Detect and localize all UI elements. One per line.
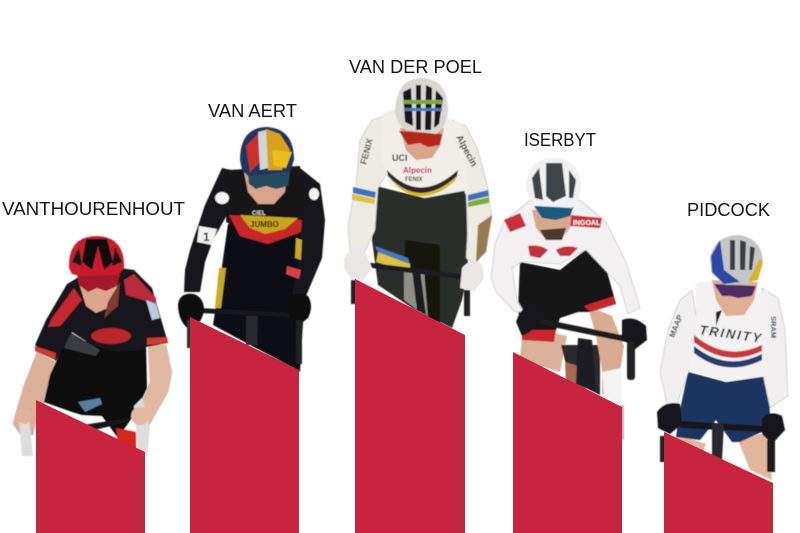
label: Van der Poel: VAN DER POEL — [349, 57, 482, 77]
helmet — [240, 127, 294, 176]
jersey text: Alpecin — [403, 166, 432, 175]
handlebar and bike — [538, 318, 626, 342]
glasses — [248, 172, 290, 189]
label: Pidcock: PIDCOCK — [687, 200, 770, 220]
helmet — [69, 236, 124, 276]
rider: Van Aert: JUMBO — [250, 220, 279, 229]
face — [400, 128, 444, 160]
jersey — [688, 280, 768, 382]
glasses — [77, 274, 120, 292]
belgian band — [229, 215, 302, 244]
hands and bike — [199, 308, 292, 317]
rider: Iserbyt — [491, 158, 647, 440]
rider: Pidcock: MAAP — [668, 313, 685, 339]
face — [712, 280, 758, 316]
arms — [348, 115, 395, 254]
rider: Vanthourenhout — [13, 236, 172, 456]
helmet — [710, 235, 763, 285]
arms — [660, 290, 700, 405]
number bib — [197, 226, 217, 245]
rider: Pidcock: SRAM — [769, 316, 778, 338]
left arm — [13, 352, 56, 435]
shorts — [518, 248, 616, 330]
right arm — [133, 345, 172, 430]
rider: Van Aert: 1 — [203, 230, 210, 244]
bar: Vanthourenhout — [36, 400, 145, 533]
rider: Van der Poel — [344, 78, 492, 328]
helmet — [526, 158, 581, 208]
shorts — [44, 340, 147, 438]
shorts and legs — [372, 186, 468, 328]
handlebar and hands — [680, 421, 764, 432]
jersey — [382, 108, 468, 198]
rider: Pidcock — [657, 235, 788, 480]
label: Iserbyt: ISERBYT — [524, 130, 596, 150]
bar: Van Aert — [190, 317, 299, 533]
face — [532, 208, 572, 240]
handlebar and bike — [83, 418, 128, 431]
face — [78, 278, 118, 313]
jersey — [35, 268, 168, 361]
rider: Van Aert — [178, 127, 325, 372]
rider: Van der Poel: UCI — [392, 153, 408, 163]
shorts — [676, 372, 770, 442]
rider: Van der Poel: Alpecin — [453, 133, 479, 169]
jersey text: CIEL — [252, 211, 266, 217]
bar: Van der Poel — [355, 279, 465, 533]
sleeve rainbow bands — [353, 187, 376, 198]
arms — [184, 168, 240, 292]
bar: Iserbyt — [513, 352, 622, 533]
rider: Van der Poel: FENIX — [405, 177, 423, 183]
glasses — [534, 206, 574, 220]
jersey — [226, 166, 305, 244]
label: Vanthourenhout: VANTHOURENHOUT — [2, 199, 185, 219]
jersey text: TRINITY — [699, 322, 763, 346]
legs and shorts — [213, 224, 306, 372]
glasses — [714, 284, 756, 298]
jumbo leg text — [215, 268, 226, 308]
knee and lower legs — [738, 432, 772, 480]
helmet — [395, 78, 448, 134]
face — [244, 170, 288, 204]
rider: Van der Poel: FENIX — [358, 137, 375, 166]
jersey and arms — [491, 200, 640, 314]
handlebar and hands — [364, 262, 462, 279]
label: Van Aert: VAN AERT — [208, 101, 297, 121]
glasses — [399, 131, 442, 147]
rider: Iserbyt: INGOAL — [573, 220, 601, 227]
legs and bike — [520, 330, 567, 372]
bar: Pidcock — [664, 432, 773, 533]
